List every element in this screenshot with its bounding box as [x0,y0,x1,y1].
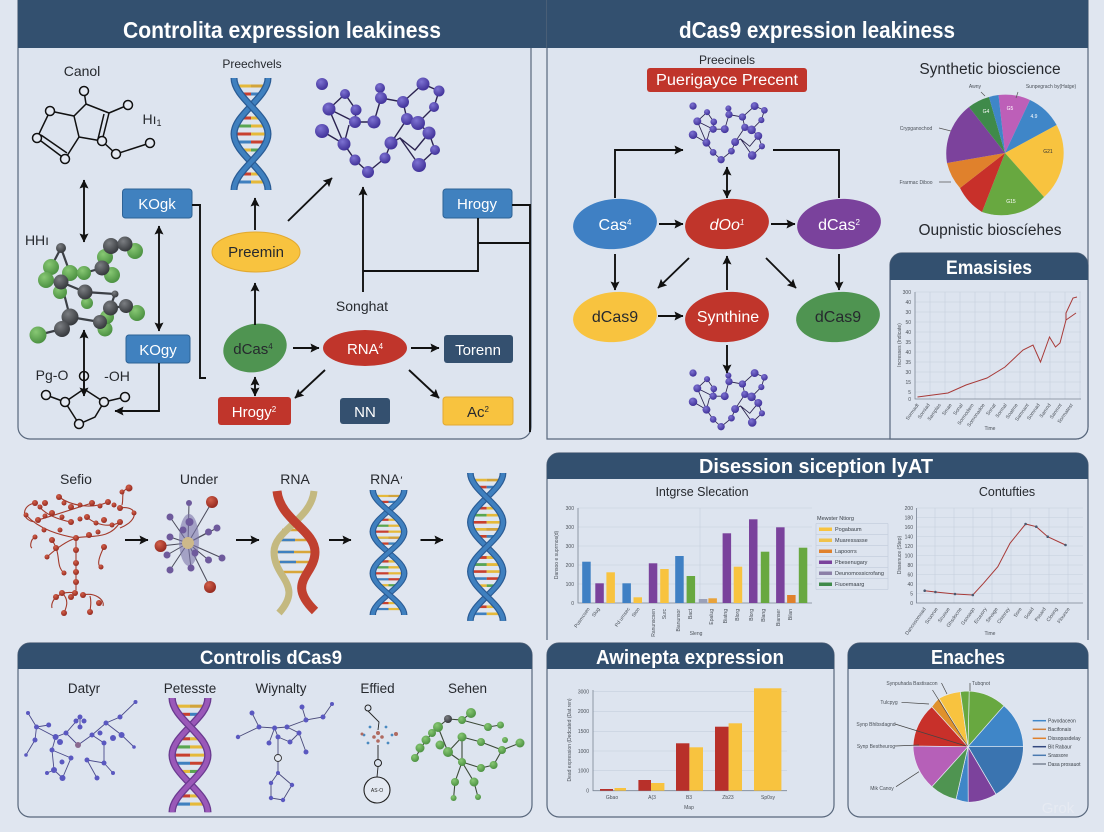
bar chart: Intgrse Slecation: 300 [566,525,574,531]
line chart: Contufties: Ghsdocne [946,607,964,629]
icon: DNA helix 5 [470,473,503,621]
node: dCas9 yellow [571,288,659,346]
panel title: Controlis dCas9 [200,648,342,669]
line chart: Emasisies: Smae [941,403,954,417]
line chart: Contufties: 200 [905,506,913,512]
bar chart: Intgrse Slecation: Epalug [709,609,715,625]
icon: ring molecule top [32,86,154,164]
line chart: Emasisies: Samnant [1014,402,1031,423]
box: Ac [443,397,513,425]
node: RNA: RNA [347,341,379,358]
bar chart: Intgrse Slecation: Blang [761,609,767,622]
icon: Effied diagram: AS·O [371,788,383,794]
bar chart: Intgrse Slecation: Ston [631,607,642,619]
node: dCas2: 2 [855,218,860,227]
line chart: Emasisies: Time [985,426,996,432]
label: Sefio: Sefio [60,471,92,487]
arrow [329,539,351,541]
label: RNA: RNA [280,471,310,487]
line chart: Contufties: 120 [905,544,913,550]
line chart: Emasisies: 300 [903,290,911,296]
bar chart: Awinepta expression: Map [684,805,694,811]
node: RNA [323,330,407,366]
node: dCas9 green [794,288,882,346]
line chart: Emasisies: 50 [905,320,911,326]
icon: purple DNA helix [172,698,208,812]
node: Synthine: Synthine [697,309,759,326]
bar chart: Intgrse Slecation: Pd umsec [614,606,632,628]
bar chart: Intgrse Slecation: Blorg [735,609,741,621]
box: Ac: Ac [467,404,485,421]
bar chart: Intgrse Slecation: Dansoo e suprrnos(d) [554,530,560,579]
pie callouts: Synp Bhibsdagnd [856,722,896,728]
line chart: Contufties: 100 [905,554,913,560]
bar chart: Awinepta expression [567,688,787,811]
bar chart: Intgrse Slecation: 300 [566,506,574,512]
line chart: Emasisies: Samnd [1039,403,1053,419]
node: dOo: 1 [740,218,744,227]
line chart: Contufties: Soaid [1023,607,1036,621]
arrow [236,539,259,541]
label: Canol: Canol [64,63,100,79]
bar chart: Intgrse Slecation: Blorg [749,609,755,621]
line chart: Emasisies: Somonadoe [966,403,987,428]
box: NN [340,398,390,424]
icon: DNA helix [234,78,268,190]
node: Cas [571,195,659,253]
line chart: Emasisies: 40 [905,350,911,356]
pie chart: Synthetic bioscience: G5 [1007,106,1014,112]
bar chart: Awinepta expression: Gbao [606,795,618,801]
icon: purple molecule [315,78,444,178]
bar chart: Intgrse Slecation: Surc [662,609,668,619]
line chart: Emasisies [897,290,1081,432]
bar chart: Awinepta expression: A(3 [648,795,656,801]
box: NN: NN [354,404,376,421]
panel title: Emasisies [946,258,1032,279]
label: Effied: Effied [360,681,395,696]
legend: bar chart: Deunomossicrofang [835,571,884,577]
legend: pie chart: Dissopasdelay [1048,736,1081,742]
icon: ring molecule bottom [42,372,130,428]
line chart: Emasisies: 5 [908,390,911,396]
line chart: Contufties: 0 [910,601,913,607]
label: HI1: 1 [156,118,162,128]
pie callouts [856,681,991,792]
pie callouts: Tulcpyg [880,700,898,706]
line chart: Contufties: Sore [1013,607,1024,619]
node: dCas9 green: dCas9 [815,309,861,326]
arrow [420,539,443,541]
box: Hrogy red: Hrogy [232,404,272,421]
box: Torenn [444,335,513,363]
panel title: Enaches [931,647,1005,669]
pie chart: Synthetic bioscience: Crypganochod [900,126,932,132]
node: Synthine [683,288,771,346]
line chart: Contufties: Scuorue [924,607,940,625]
line chart: Emasisies: 35 [905,340,911,346]
icon: blue-purple molecule [24,700,138,781]
pie chart: Synthetic bioscience: 4.9 [1031,114,1038,120]
legend: bar chart: Pogabaum [835,527,862,533]
line chart: Contufties: 160 [905,525,913,531]
icon: purple molecule top [689,102,768,163]
node: dOo: dOo [710,217,740,234]
pie chart: Enaches [913,691,1023,802]
pie callouts: Synpuhada Bastisacon [886,681,938,687]
node: Cas: Cas [599,217,627,234]
bar chart: Intgrse Slecation: Pusmcsen [573,607,592,629]
icon: RNA ribbon [274,491,315,613]
line chart: Contufties: Scuoue [937,607,952,624]
line chart: Emasisies: Sanmnt [1049,402,1064,420]
pie chart: Synthetic bioscience [899,84,1076,215]
label: Wiynalty: Wiynalty [255,681,307,696]
label: Sehen: Sehen [448,681,487,696]
box: Torenn: Torenn [455,342,501,359]
bar chart: Awinepta expression: B3 [686,795,692,801]
box: KOgy [126,335,190,363]
label: Preechvels: Preechvels [222,57,282,71]
bar chart: Intgrse Slecation: 100 [566,582,574,588]
line chart: Emasisies: Incresses (Indicate) [897,323,903,367]
panel: Controlita expression leakiness [18,0,547,439]
bar chart: Awinepta expression: 3000 [578,690,589,696]
header bar [547,643,834,669]
box: Hrogy red: 2 [272,405,277,414]
pie chart: Synthetic bioscience: Frarmac Diboo [899,180,933,186]
icon: green molecule [411,708,524,801]
chart title: Intgrse Slecation [655,485,749,499]
box: Hrogy blue: Hrogy [457,196,498,213]
panel: Controlis dCas9 [18,643,532,817]
legend: bar chart: Fiuoemaarg [835,582,864,588]
bar chart: Intgrse Slecation: Sleng [690,631,703,637]
line chart: Contufties: Pssard [1034,607,1048,623]
line chart: Emasisies: Sormadt [905,402,921,422]
line chart: Emasisies: Sormodern [957,403,976,426]
icon: Wiynalty molecule [236,702,334,802]
box: Hrogy red [218,397,291,425]
bar chart: Intgrse Slecation: Bact [688,608,694,619]
bar chart: Intgrse Slecation: Slug [591,607,602,618]
legend: pie chart: Bacifonais [1048,727,1072,733]
line chart: Contufties [897,506,1083,637]
legend: pie chart: Bit Rabaur [1048,744,1072,750]
node: RNA: 4 [379,342,384,351]
line chart: Emasisies: Sorniad [917,403,932,420]
line chart: Contufties: Flounce [1057,607,1072,625]
line chart: Emasisies: 15 [905,380,911,386]
pie chart: Synthetic bioscience: Awny [969,84,982,90]
header bar [848,643,1088,669]
red title box [647,68,807,92]
node: dCas: dCas [233,341,268,358]
label: Preecinels: Preecinels [699,53,755,67]
line chart: Emasisies: 30 [905,370,911,376]
pie chart: Synthetic bioscience: G4 [983,109,990,115]
label: HH: HHı [25,232,49,248]
watermark: Grok [1042,800,1075,817]
legend: bar chart: Pbesenugary [835,560,868,566]
legend: bar chart: Muaressasse [835,538,868,544]
header bar [18,643,532,669]
line chart: Emasisies: Sormatest [1057,402,1075,425]
box: KOgk: KOgk [138,196,176,213]
node: dOo [683,195,771,253]
heading: Synthetic bioscience: Synthetic bioscience [919,61,1061,78]
box: KOgy: KOgy [139,342,177,359]
bar chart: Awinepta expression: 1000 [578,768,589,774]
bar chart: Intgrse Slecation [554,506,812,637]
label: Songhat: Songhat [336,298,388,314]
line chart: Emasisies: Soatme [1005,403,1020,420]
line chart: Emasisies: Sonal [952,403,965,417]
node: dCas: 4 [268,342,273,351]
legend: pie chart: Srassore [1048,753,1068,759]
bar chart: Awinepta expression: Zb23 [722,795,734,801]
pie callouts: Synp Bestheurog [857,744,895,750]
panel title: dCas9 expression leakiness [679,17,955,43]
bar chart: Awinepta expression: Sp0sy [761,795,775,801]
line chart: Contufties: 180 [905,516,913,522]
line chart: Contufties: 40 [907,582,913,588]
node: dCas2: dCas [818,217,855,234]
box: Ac: 2 [485,405,490,414]
legend: pie chart: Pavodaceon [1048,718,1076,724]
line chart: Emasisies: Somnad [1026,403,1042,421]
label: OH: -OH [104,368,130,384]
line chart: Emasisies: 0 [908,397,911,403]
bar chart: Intgrse Slecation: Bianser [776,609,782,626]
line chart: Contufties: Gsosaqo [960,607,977,627]
node: dCas9 yellow: dCas9 [592,309,638,326]
panel: Enaches [848,643,1088,817]
pie chart: Synthetic bioscience: G21 [1043,149,1053,155]
line chart: Contufties: Dissenuce (Step) [897,535,903,574]
line chart: Contufties: 60 [907,572,913,578]
bar chart: Intgrse Slecation: 300 [566,544,574,550]
bar chart: Intgrse Slecation: 0 [571,601,574,607]
pie callouts: Mik Canoy [870,786,894,792]
legend: pie chart [1033,718,1081,768]
header bar [547,453,1088,479]
bar chart: Intgrse Slecation: Bilan [788,609,794,620]
icon: green molecule [30,236,145,344]
bar chart: Intgrse Slecation: Ranunscsen [651,609,657,637]
line chart: Emasisies: 35 [905,360,911,366]
icon: Effied diagram [360,705,398,803]
chart title: Contufties [979,485,1035,499]
label: Under: Under [180,471,218,487]
line chart: Contufties: Sevage [985,607,1000,624]
line chart: Contufties: Ecuuory [973,606,989,625]
line chart: Contufties: 5 [910,592,913,598]
arrows: right pathway [615,150,839,373]
bar chart: Awinepta expression: Dead expression (Dedcated (Dat.ren) [567,698,573,782]
node: Preemin [212,232,300,272]
header bar [547,0,1088,48]
line chart: Emasisies: 40 [905,330,911,336]
red title box: Puerigayce Precent [656,72,799,89]
bar chart: Intgrse Slecation: Bianunsor [676,609,682,632]
line chart: Contufties: Dancosomoad [904,607,928,637]
arrows: left panel pathway [84,178,530,432]
pie chart: Synthetic bioscience: Sunpegrach by(Hatge) [1026,84,1076,90]
line chart: Contufties: Time [985,631,996,637]
line chart: Emasisies: Sormal [995,403,1009,419]
node: dCas2 [795,195,883,253]
line chart: Contufties: Cistoray [996,606,1012,625]
box: Hrogy blue [443,189,512,218]
node: Preemin: Preemin [228,244,284,261]
panel: Disession siception lyAT [547,453,1088,640]
label: Petesste: Petesste [164,681,216,696]
header bar [890,253,1088,280]
bar chart: Awinepta expression: 1000 [578,749,589,755]
line chart: Emasisies: 40 [905,300,911,306]
bar chart: Intgrse Slecation: Biatng [723,609,729,623]
line chart: Emasisies: 30 [905,310,911,316]
label: Datyr: Datyr [68,681,101,696]
bar chart: Intgrse Slecation: 200 [566,563,574,569]
label: RNA prime: RNA' [370,471,403,487]
line chart: Contufties: 80 [907,563,913,569]
legend: pie chart: Dasa prosauot [1048,762,1081,768]
bar chart: Awinepta expression: 2000 [578,709,589,715]
label: HI1: Hı [142,111,156,127]
panel title: Disession siception lyAT [699,456,933,478]
panel: Emasisies [890,253,1088,439]
line chart: Emasisies: Sonat [985,402,998,417]
node: dCas [219,318,291,378]
label: Pg-O: Pg-O [36,367,68,383]
panel: dCas9 expression leakiness [547,0,1088,439]
pie chart: Synthetic bioscience: G15 [1006,199,1016,205]
legend: bar chart [816,516,888,590]
line chart: Contufties: 140 [905,534,913,540]
icon: radial molecule [155,496,226,593]
line chart: Emasisies: Samplas [927,402,943,422]
panel title: Controlita expression leakiness [123,17,441,43]
panel title: Awinepta expression [596,647,784,669]
arrow [125,539,148,541]
icon: DNA helix 4 [373,490,404,615]
legend: bar chart: Lapoorrs [835,549,857,555]
bar chart: Awinepta expression: 1500 [578,729,589,735]
node: Cas: 4 [627,218,632,227]
legend: bar chart: Mewster Ntiorg [817,516,854,522]
box: KOgk [122,189,192,218]
icon: purple molecule bottom [689,369,768,430]
panel: Awinepta expression [547,643,834,817]
header bar [18,0,547,48]
pie callouts: Tubqnot [972,681,991,687]
heading: Oupnistic bioscíehes: Oupnistic bioscíehes [918,222,1062,239]
icon: red branched molecule [24,484,136,616]
bar chart: Awinepta expression: 0 [586,788,589,794]
line chart: Contufties: Cloong [1046,607,1060,623]
